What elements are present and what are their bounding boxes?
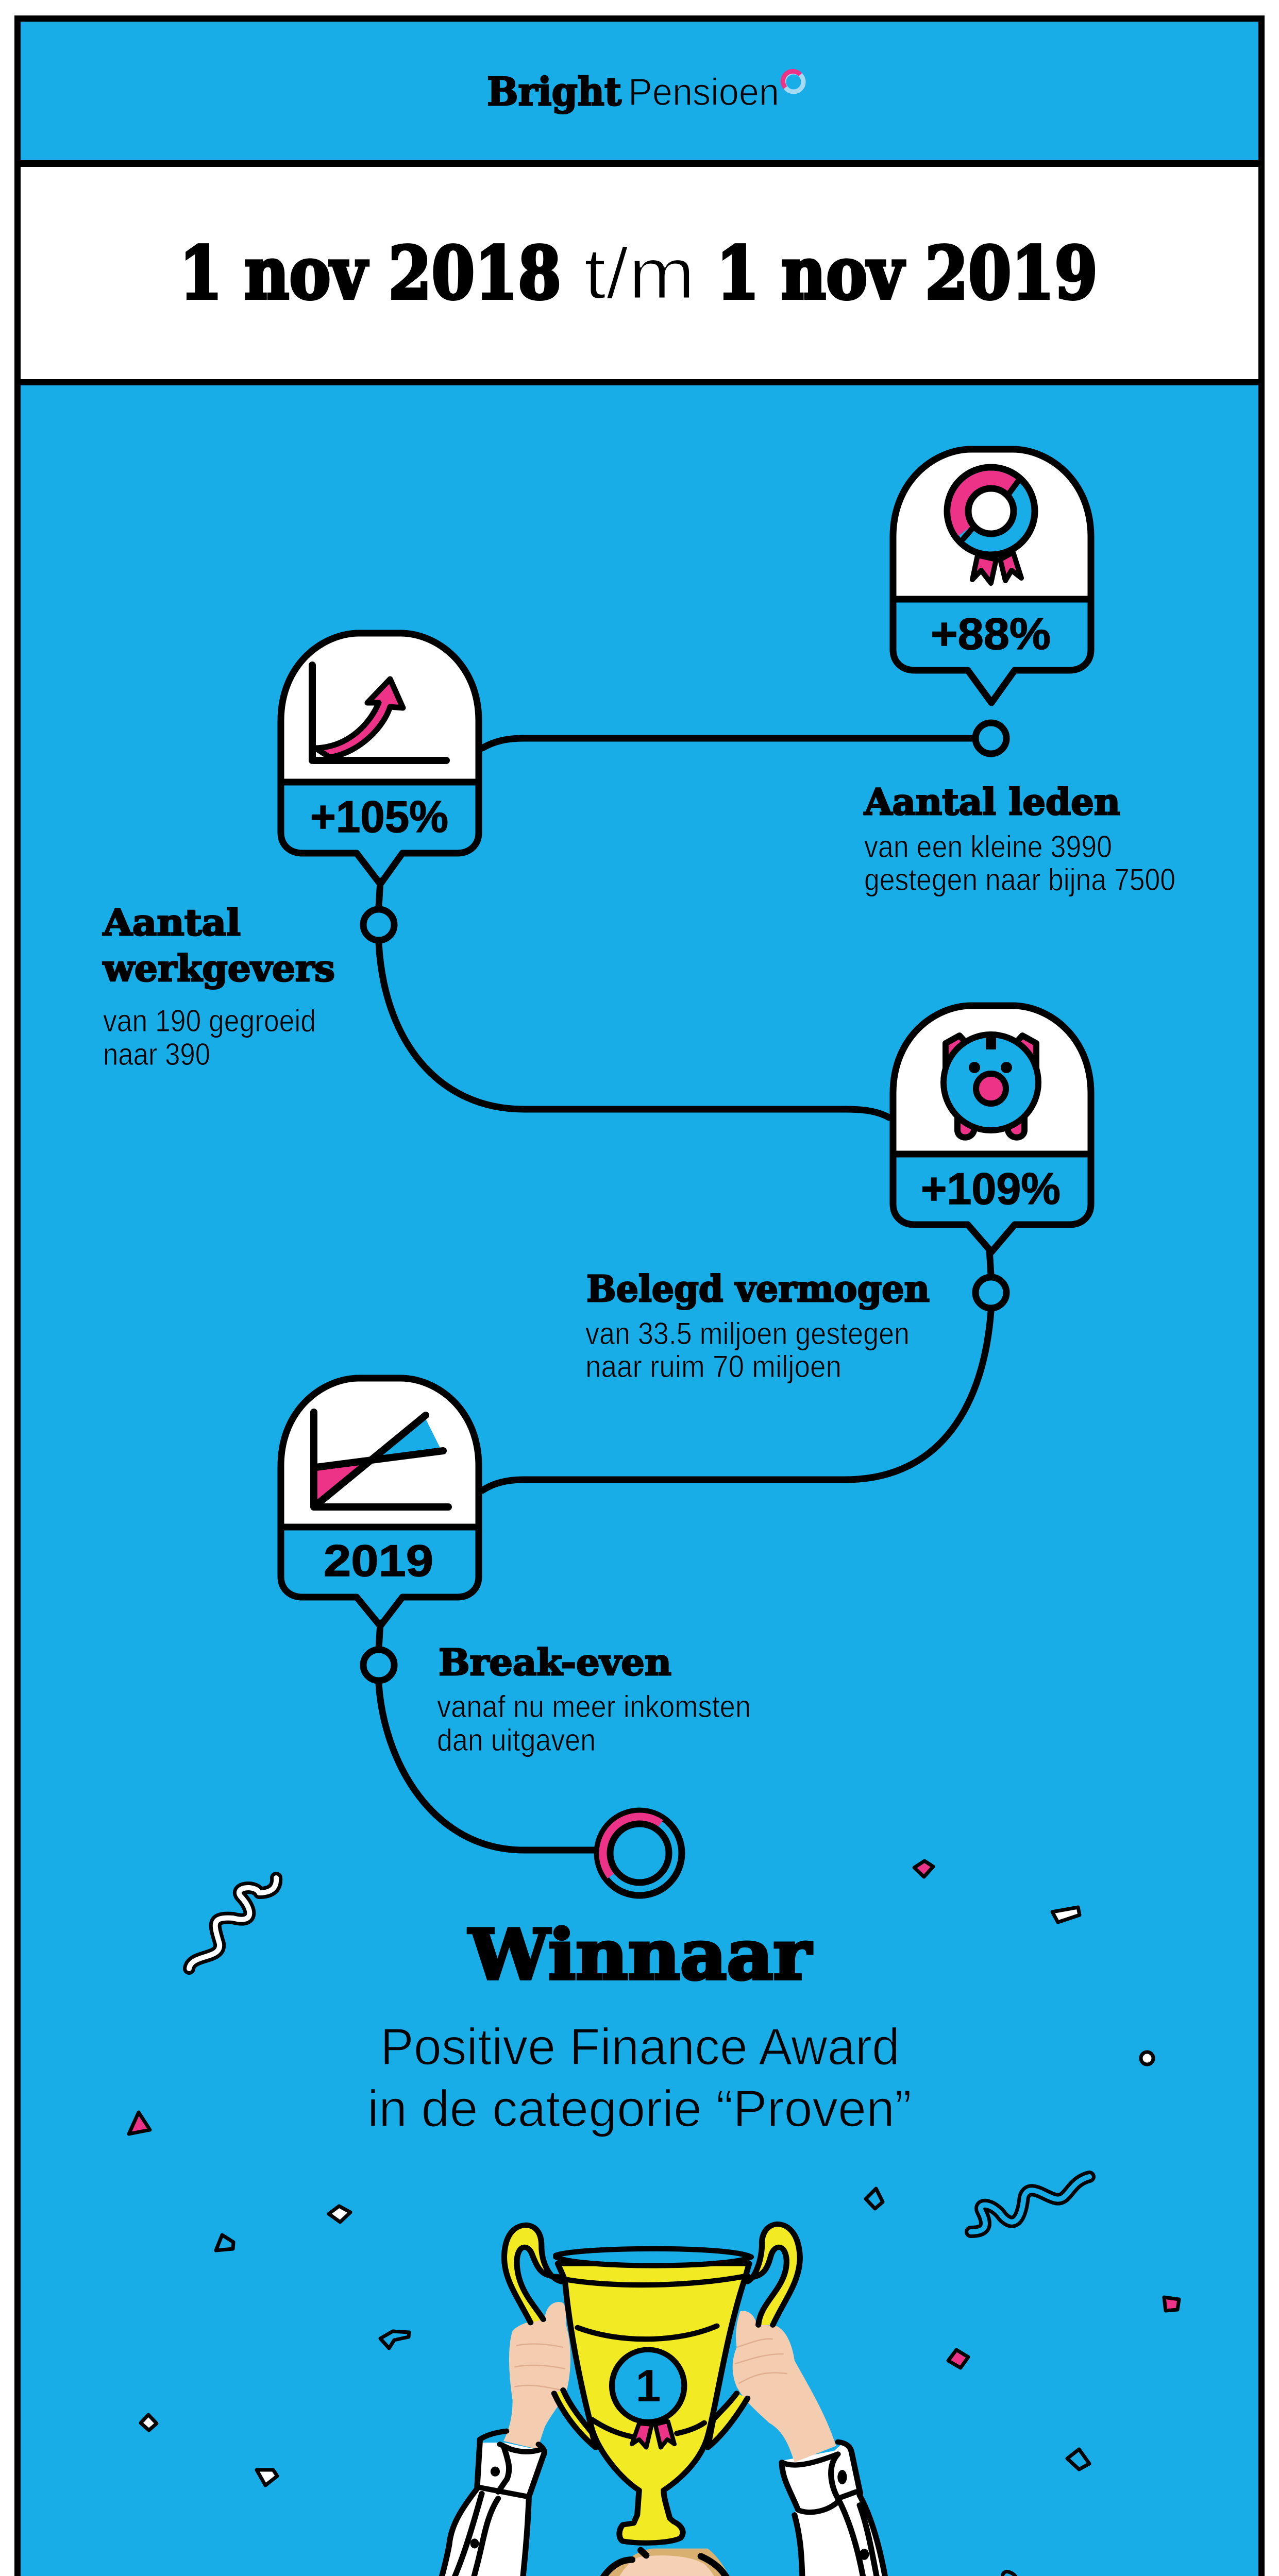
person: line art arms xyxy=(432,2431,892,2576)
title: t/m xyxy=(584,233,695,314)
label: 2019 xyxy=(324,1536,433,1586)
icon: award ring xyxy=(597,1811,682,1895)
logo: Pensioen xyxy=(628,71,779,113)
sleeves xyxy=(433,2443,893,2576)
person: shirt, trousers and skin fills xyxy=(433,2302,893,2576)
text block: belegd vermogen: van 33.5 miljoen gestegen xyxy=(585,1316,910,1351)
title: 1 nov 2018 xyxy=(179,231,561,316)
hands xyxy=(503,2302,836,2462)
text block: award xyxy=(367,2018,912,2138)
confetti: left side xyxy=(102,2206,409,2576)
logo: Bright xyxy=(487,69,621,114)
head xyxy=(592,2549,741,2576)
node: aantal leden xyxy=(975,723,1006,754)
trophy handles xyxy=(504,2224,800,2448)
text block: aantal leden: van een kleine 3990 xyxy=(864,829,1112,864)
text block: belegd vermogen: naar ruim 70 miljoen xyxy=(585,1349,842,1384)
title: 1 nov 2019 xyxy=(716,231,1098,316)
label: +109% xyxy=(921,1164,1061,1214)
text block: belegd vermogen xyxy=(585,1267,930,1384)
bubble: belegd vermogen xyxy=(893,1006,1091,1252)
confetti: upper xyxy=(129,1878,276,2134)
text block: aantal werkgevers: Aantal xyxy=(103,901,241,944)
trophy medal xyxy=(612,2350,684,2422)
text block: break-even: dan uitgaven xyxy=(437,1723,596,1757)
text block: aantal leden: Aantal leden xyxy=(864,781,1120,823)
header band xyxy=(18,19,1261,163)
text block: belegd vermogen: Belegd vermogen xyxy=(586,1267,930,1310)
text block: break-even: vanaf nu meer inkomsten xyxy=(437,1689,751,1724)
icon: break-even chart xyxy=(314,1412,448,1507)
node: break-even xyxy=(363,1650,394,1681)
text block: award: Positive Finance Award xyxy=(380,2018,900,2076)
trophy number: 1 xyxy=(636,2360,661,2411)
icon: piggy bank xyxy=(944,1035,1038,1138)
icon: growth chart xyxy=(312,665,446,760)
text block: award: in de categorie “Proven” xyxy=(367,2080,912,2138)
logo xyxy=(487,69,803,114)
text block: aantal leden: gestegen naar bijna 7500 xyxy=(864,862,1175,897)
bubble: aantal werkgevers xyxy=(281,633,479,884)
label: +105% xyxy=(310,792,448,842)
node: aantal werkgevers xyxy=(363,909,394,940)
bubble: break-even xyxy=(281,1378,479,1626)
text block: aantal werkgevers: werkgevers xyxy=(103,947,335,990)
text block: break-even: Break-even xyxy=(439,1641,671,1684)
connector lines xyxy=(379,738,991,1850)
icon: rosette xyxy=(947,467,1035,583)
label: +88% xyxy=(931,609,1051,659)
text block: aantal werkgevers xyxy=(103,901,335,1072)
text block: aantal werkgevers: naar 390 xyxy=(103,1037,210,1072)
title xyxy=(179,231,1098,316)
text block: break-even xyxy=(437,1641,751,1757)
text block: aantal leden xyxy=(864,781,1175,897)
trophy xyxy=(504,2224,800,2543)
node: belegd vermogen xyxy=(975,1277,1006,1308)
bubble: aantal leden xyxy=(893,449,1091,703)
text block: aantal werkgevers: van 190 gegroeid xyxy=(103,1004,316,1038)
heading: winnaar: Winnaar xyxy=(468,1914,812,1995)
confetti: right side xyxy=(866,1861,1216,2576)
trophy cup xyxy=(558,2264,749,2543)
